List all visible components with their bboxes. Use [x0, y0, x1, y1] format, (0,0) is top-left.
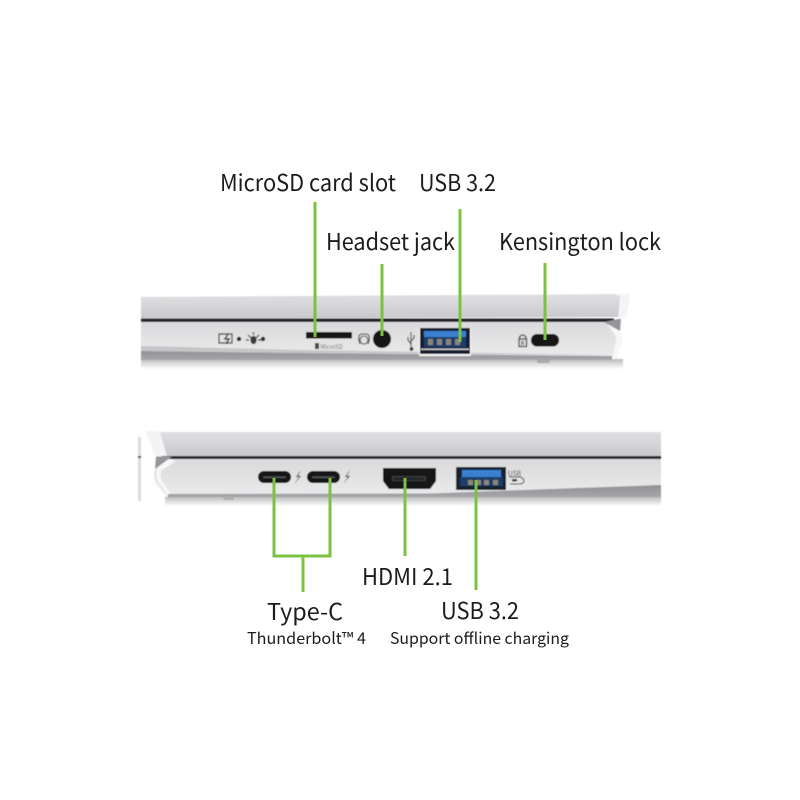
label: Headset jack: Headset jack	[326, 223, 455, 257]
bottom laptop base	[154, 459, 661, 497]
lock icon	[519, 335, 526, 346]
bottom laptop shadow	[165, 497, 661, 506]
label: HDMI 2.1: HDMI 2.1	[362, 558, 453, 592]
usb symbol	[408, 332, 414, 350]
MicroSD label	[315, 343, 319, 349]
label: Support offline charging: Support offline charging	[390, 625, 569, 649]
foot	[537, 360, 550, 363]
port: HDMI	[383, 468, 436, 489]
left edge fragment	[138, 437, 141, 501]
port: Thunderbolt 2	[307, 471, 340, 483]
port: headset jack	[373, 330, 391, 348]
label: Kensington lock: Kensington lock	[499, 223, 661, 257]
status indicators	[219, 332, 261, 344]
line: USB top	[458, 209, 462, 342]
panel: top laptop side view: MicroSD	[320, 341, 343, 351]
top laptop hinge line	[141, 318, 614, 322]
top laptop base	[141, 321, 622, 359]
line: Headset	[380, 264, 384, 336]
foot	[223, 497, 234, 500]
line: HDMI	[404, 478, 406, 556]
label: USB 3.2 top: USB 3.2	[419, 164, 496, 198]
top laptop shadow	[141, 359, 623, 369]
charging icon: USB	[508, 469, 521, 479]
line: Kensington	[544, 263, 546, 340]
callout lines	[274, 202, 545, 592]
port: Kensington lock	[531, 334, 559, 346]
thunderbolt icon 1	[294, 470, 301, 484]
line: USB bottom	[474, 480, 478, 590]
label: Type-C: Type-C	[267, 593, 343, 627]
port: Thunderbolt 1	[258, 471, 291, 483]
headset icon	[359, 334, 369, 344]
charging icon	[508, 469, 524, 484]
line: Type-C bracket	[274, 478, 330, 592]
port: USB 3.2	[419, 328, 471, 356]
bottom laptop lid	[146, 431, 661, 456]
bottom laptop hinge line	[162, 456, 661, 459]
thunderbolt icon 2	[343, 470, 350, 484]
label: Thunderbolt 4: Thunderbolt™ 4	[247, 625, 366, 649]
panel: bottom laptop side view	[138, 431, 661, 506]
label: MicroSD card slot: MicroSD card slot	[220, 164, 396, 198]
port: MicroSD slot	[306, 332, 352, 338]
label: USB 3.2 bottom: USB 3.2	[441, 592, 519, 626]
panel: top laptop side view	[141, 294, 630, 369]
port: USB 3.2 charging	[456, 467, 506, 490]
line: MicroSD	[314, 202, 316, 337]
top laptop lid	[141, 294, 630, 319]
